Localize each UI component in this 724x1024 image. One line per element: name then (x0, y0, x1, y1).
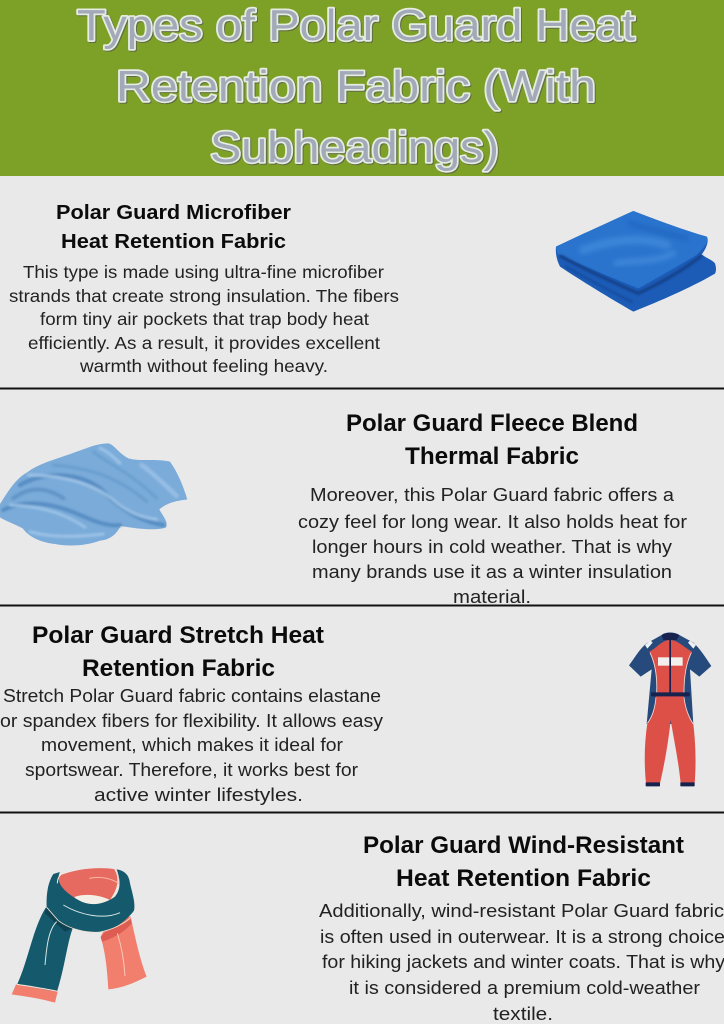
divider line 1 (0, 388, 724, 390)
heading: fleece blend: Polar Guard Fleece Blend (346, 410, 638, 437)
heading: microfiber: Heat Retention Fabric (61, 230, 286, 253)
divider line 2 (0, 604, 724, 606)
panel: fleece blend (0, 410, 687, 607)
text block: stretch (0, 686, 383, 805)
text block: wind-resistant (319, 901, 724, 1024)
text block: fleece blend (298, 485, 687, 607)
text block: wind-resistant: textile. (493, 1004, 553, 1024)
text block: stretch: or spandex fibers for flexibility. It allows easy (0, 711, 383, 731)
heading: microfiber: Polar Guard Microfiber (56, 201, 291, 224)
title: Subheadings) (210, 123, 499, 172)
heading: wind-resistant: Heat Retention Fabric (396, 865, 651, 892)
divider line 3 (0, 812, 724, 814)
text block: microfiber: efficiently. As a result, it provides excellent (28, 333, 380, 353)
text block: stretch: sportswear. Therefore, it works best for (25, 760, 358, 780)
text block: fleece blend: cozy feel for long wear. It also holds heat for (298, 512, 687, 532)
heading: wind-resistant (363, 832, 684, 892)
text block: microfiber: form tiny air pockets that trap body heat (40, 309, 369, 329)
text block: wind-resistant: is often used in outerwear. It is a strong choice (320, 927, 724, 947)
icon: crumpled light blue fleece (0, 443, 187, 546)
text block: stretch: Stretch Polar Guard fabric contains elastane (3, 686, 381, 706)
icon: teal and coral scarf (12, 868, 147, 1003)
heading: fleece blend: Thermal Fabric (405, 443, 579, 470)
text block: fleece blend: material. (453, 587, 531, 607)
text block: microfiber: This type is made using ultra-fine microfiber (23, 262, 384, 282)
header banner (0, 0, 724, 176)
heading: stretch (32, 622, 324, 682)
icon: folded blue microfiber towel (556, 211, 716, 312)
heading: fleece blend (346, 410, 638, 470)
text block: wind-resistant: it is considered a premium cold-weather (349, 978, 700, 998)
heading: stretch: Retention Fabric (82, 655, 275, 682)
heading: stretch: Polar Guard Stretch Heat (32, 622, 324, 649)
icon: red and navy jumpsuit (629, 632, 711, 786)
panel: stretch (0, 622, 711, 805)
heading: microfiber (56, 201, 291, 253)
text block: microfiber (9, 262, 399, 376)
text block: microfiber: warmth without feeling heavy. (79, 356, 328, 376)
panel: wind-resistant (12, 832, 724, 1024)
text block: fleece blend: Moreover, this Polar Guard fabric offers a (310, 485, 675, 505)
text block: fleece blend: longer hours in cold weather. That is why (312, 537, 672, 557)
title: Types of Polar Guard Heat (77, 1, 635, 50)
title (77, 1, 635, 172)
panel: microfiber (9, 201, 716, 376)
text block: microfiber: strands that create strong insulation. The fibers (9, 286, 399, 306)
heading: wind-resistant: Polar Guard Wind-Resistant (363, 832, 684, 859)
text block: wind-resistant: Additionally, wind-resistant Polar Guard fabric (319, 901, 724, 921)
text block: wind-resistant: for hiking jackets and winter coats. That is why (322, 952, 724, 972)
text block: fleece blend: many brands use it as a winter insulation (312, 562, 672, 582)
text block: stretch: active winter lifestyles. (94, 785, 303, 805)
text block: stretch: movement, which makes it ideal for (41, 735, 343, 755)
title: Retention Fabric (With (116, 62, 596, 111)
